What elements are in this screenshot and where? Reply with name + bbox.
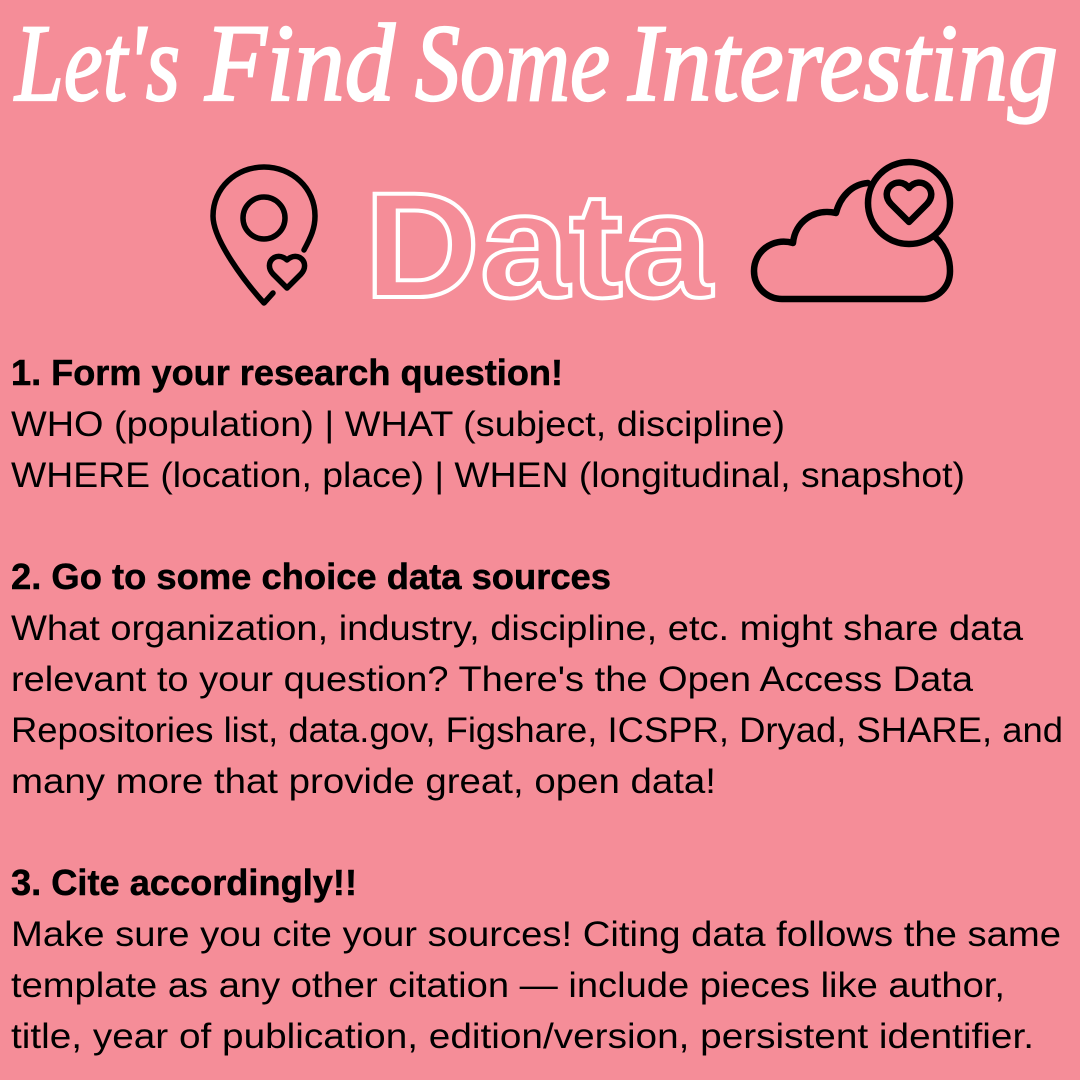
section 3 heading: 3. Cite accordingly!! bbox=[11, 862, 357, 903]
section 3 body: Make sure you cite your sources! Citing data follows the same bbox=[11, 915, 1061, 954]
section 1 heading: 1. Form your research question! bbox=[11, 352, 563, 393]
section 2 body: Repositories list, data.gov, Figshare, ICSPR, Dryad, SHARE, and bbox=[11, 711, 1063, 750]
title bbox=[13, 2, 1058, 124]
title: Interesting bbox=[627, 2, 1058, 124]
section 3 body bbox=[11, 915, 1061, 1056]
section 2 body: many more that provide great, open data! bbox=[11, 762, 716, 801]
section 2 body bbox=[11, 609, 1063, 801]
section 2: choice data sources bbox=[11, 556, 1063, 801]
section 1 body: WHERE (location, place) | WHEN (longitudinal, snapshot) bbox=[11, 456, 965, 495]
section 3: cite accordingly bbox=[11, 862, 1061, 1056]
section 2 body: relevant to your question? There's the Open Access Data bbox=[11, 660, 974, 699]
section 1: form your research question bbox=[11, 352, 965, 495]
icon: cloud with heart bbox=[754, 162, 950, 299]
section 3 body: title, year of publication, edition/version, persistent identifier. bbox=[11, 1017, 1034, 1056]
section 3 body: template as any other citation — include pieces like author, bbox=[11, 966, 1005, 1005]
section 1 body: WHO (population) | WHAT (subject, discipline) bbox=[11, 405, 785, 444]
section 1 body bbox=[11, 405, 965, 495]
heading word: Data: Data bbox=[364, 161, 714, 329]
title: Let's bbox=[13, 2, 180, 124]
section 2 heading: 2. Go to some choice data sources bbox=[11, 556, 611, 597]
icon: map pin with heart bbox=[213, 167, 315, 303]
title: Find bbox=[204, 2, 395, 124]
section 2 body: What organization, industry, discipline, etc. might share data bbox=[11, 609, 1024, 648]
title: Some bbox=[415, 2, 610, 124]
